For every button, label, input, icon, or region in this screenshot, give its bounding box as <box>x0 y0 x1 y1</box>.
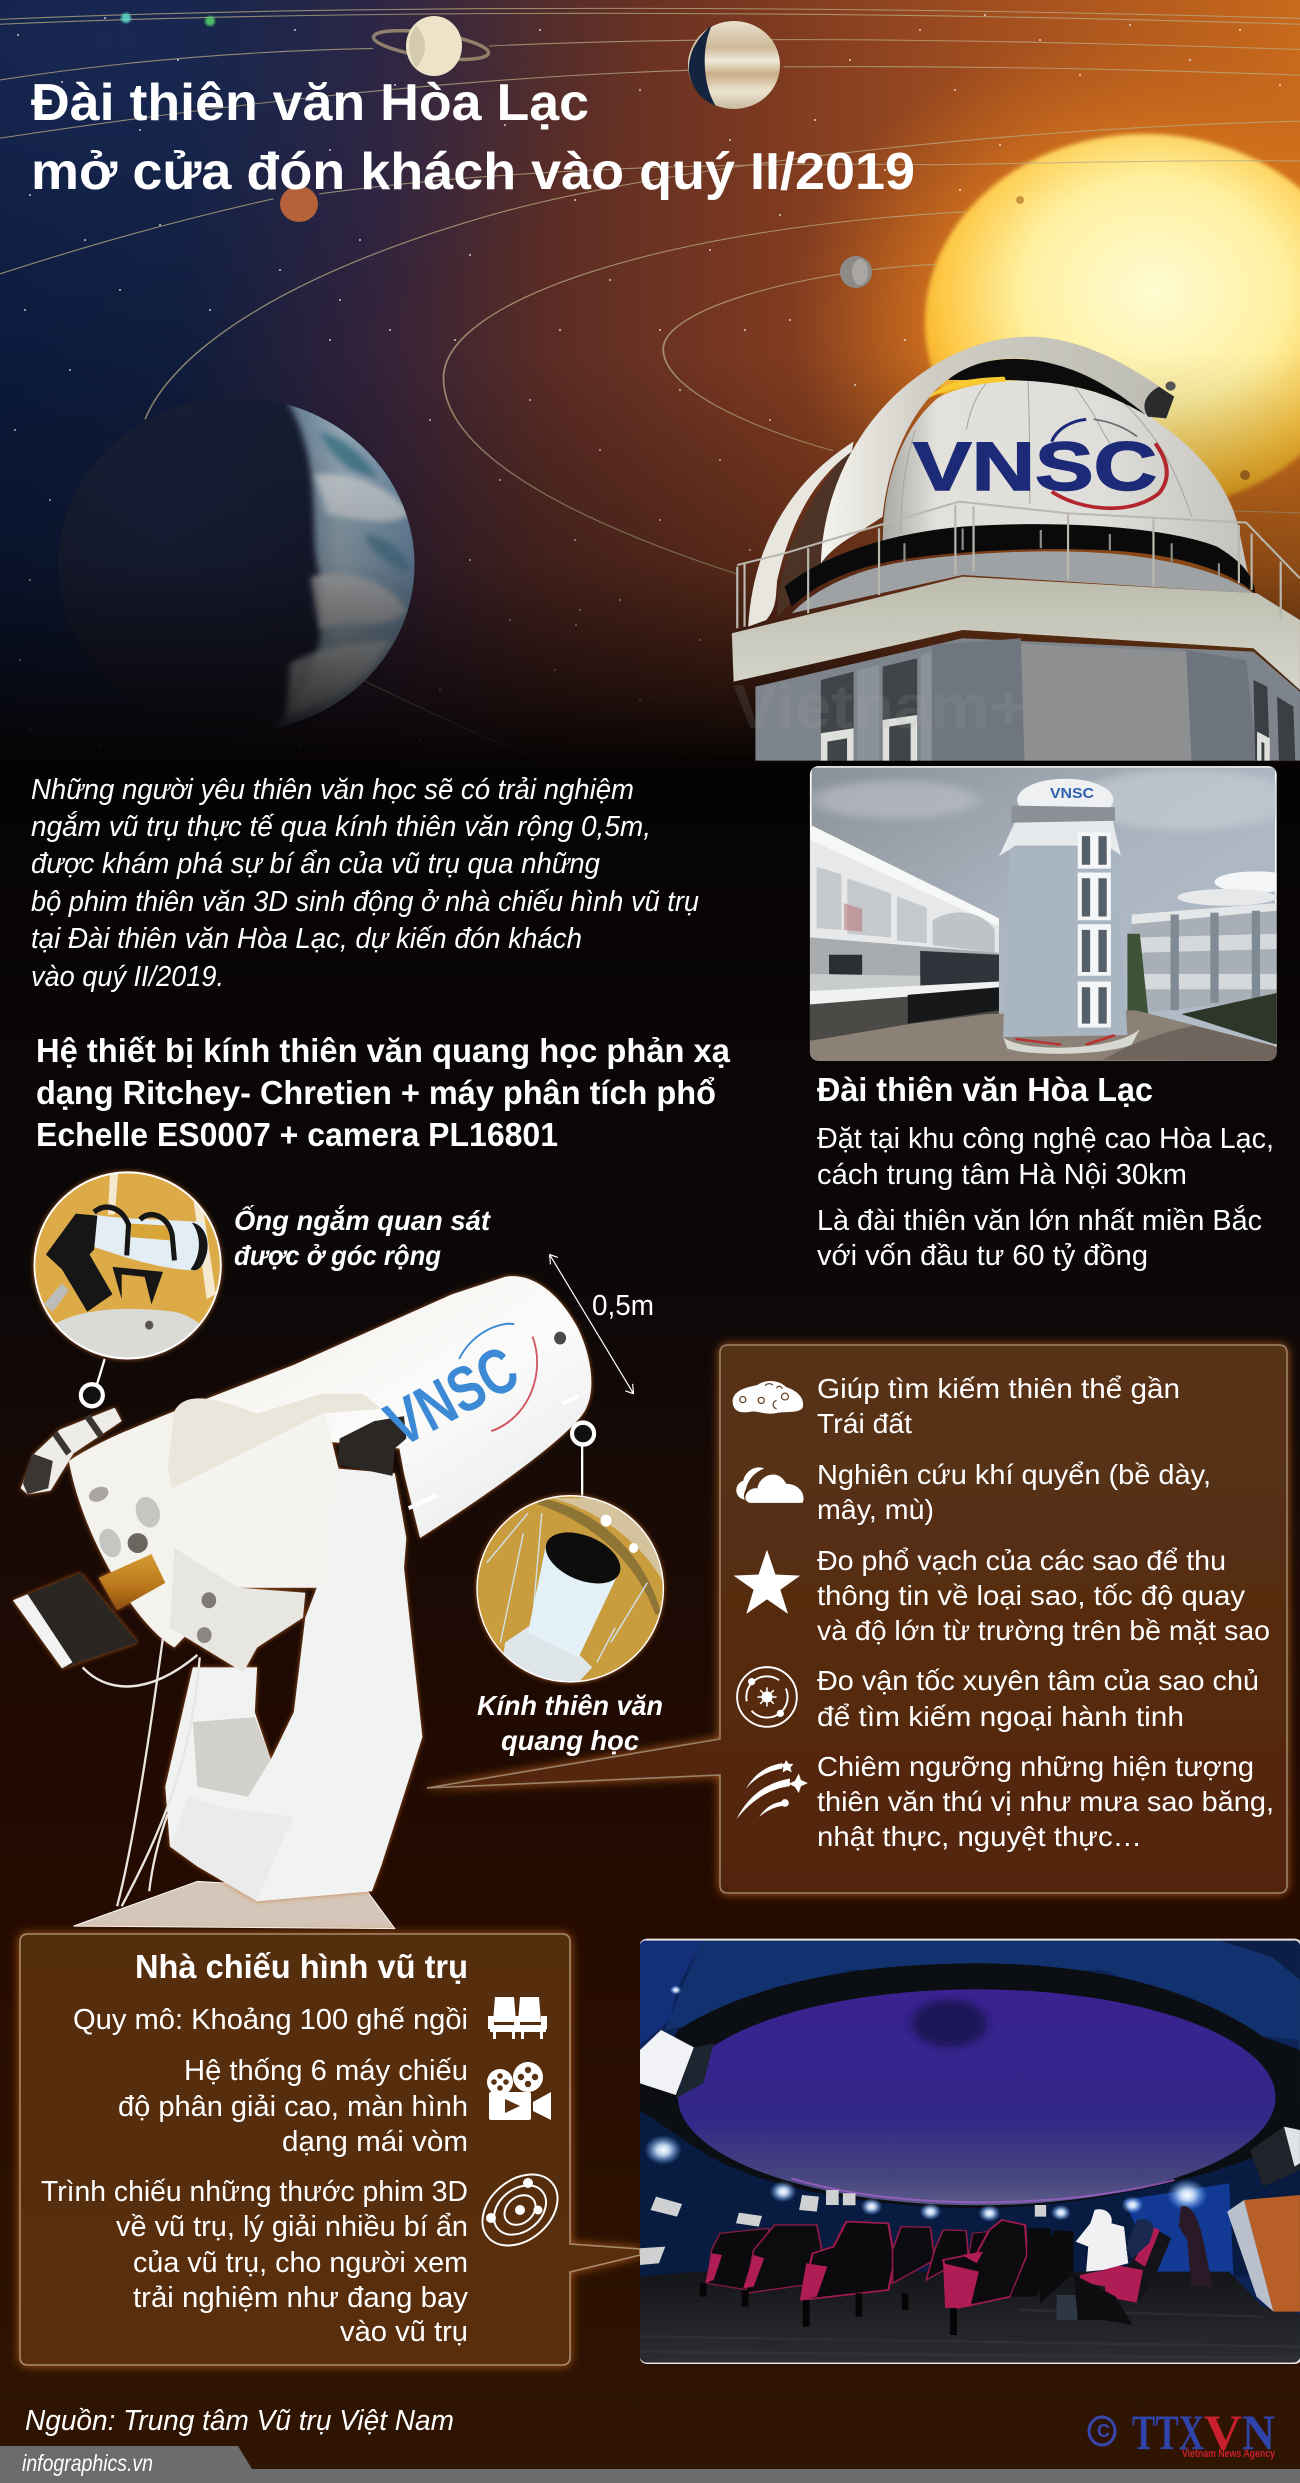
copyright mark <box>1089 2417 1115 2445</box>
tower wall <box>755 638 1300 761</box>
observatory facts <box>817 1071 1274 1272</box>
panel: telescope functions with pointer <box>427 1345 1287 1893</box>
circle photo: optical telescope <box>477 1496 675 1682</box>
pointer line to finder photo <box>94 1359 105 1394</box>
sun <box>790 32 1300 612</box>
tower <box>1003 846 1127 1037</box>
panel text: Đo vận tốc xuyên tâm của sao chủ <box>817 1665 1259 1696</box>
floor <box>640 2272 1300 2363</box>
pointer line to telescope photo <box>580 1436 585 1496</box>
planet: Earth <box>58 393 431 737</box>
camera edge <box>13 1594 73 1668</box>
fork mount <box>165 1468 422 1901</box>
intro text <box>31 774 699 993</box>
railing <box>737 502 1300 628</box>
planetarium text: Quy mô: Khoảng 100 ghế ngồi <box>73 2004 468 2036</box>
tube shading <box>168 1394 381 1488</box>
footer site name: infographics.vn <box>22 2450 153 2476</box>
facts text <box>817 1123 1274 1272</box>
intro text: tại Đài thiên văn Hòa Lạc, dự kiến đón khách <box>31 923 582 955</box>
facts text: Đặt tại khu công nghệ cao Hòa Lạc, <box>817 1123 1274 1155</box>
intro text: Những người yêu thiên văn học sẽ có trải nghiệm <box>31 774 634 806</box>
facts text: Là đài thiên văn lớn nhất miền Bắc <box>817 1204 1262 1237</box>
dome screen <box>678 1989 1276 2205</box>
panel text: mây, mù) <box>817 1494 934 1525</box>
label: optical telescope <box>477 1690 663 1756</box>
panel text: Chiêm ngưỡng những hiện tượng <box>817 1751 1254 1782</box>
planet: Jupiter <box>688 21 780 109</box>
seat cushions <box>705 2227 1160 2308</box>
footer bar <box>0 2446 1300 2483</box>
cables <box>83 1638 200 1906</box>
icon: star <box>734 1550 800 1614</box>
wall lamps <box>644 1985 1207 2222</box>
agency name: Vietnam News Agency <box>1182 2448 1276 2460</box>
telescope illustration <box>13 1170 675 1929</box>
label: finder scope: được ở góc rộng <box>234 1240 441 1271</box>
port holes <box>87 1484 164 1561</box>
balcony <box>732 577 1300 690</box>
sunlit gap <box>928 377 1006 398</box>
main arch <box>821 337 1173 563</box>
left arch of the dome <box>748 442 854 627</box>
logo: TTXVN <box>1089 2404 1276 2460</box>
gold focuser <box>99 1554 165 1610</box>
top white bar <box>640 1939 1300 1941</box>
heading: telescope equipment <box>36 1032 731 1153</box>
agency name: V <box>1204 2404 1242 2460</box>
label: optical telescope: Kính thiên văn <box>477 1690 663 1721</box>
icon: cloud <box>736 1467 804 1503</box>
planetarium text: dạng mái vòm <box>282 2126 468 2158</box>
panel text: Đo phổ vạch của các sao để thu <box>817 1545 1226 1576</box>
label: width: 0,5m <box>592 1290 654 1322</box>
dome <box>883 381 1248 573</box>
icon: shooting stars <box>736 1760 808 1819</box>
ground <box>810 1010 1277 1061</box>
planetarium heading: Nhà chiếu hình vũ trụ <box>135 1948 468 1985</box>
icon: solar system orbit <box>469 2160 571 2260</box>
right wing <box>1132 903 1277 1014</box>
icon: cinema seats <box>488 1997 547 2039</box>
title: Đài thiên văn Hòa Lạc <box>31 74 589 132</box>
panel: planetarium <box>20 1934 640 2365</box>
pointer dot: finder <box>81 1384 103 1406</box>
panel text: thiên văn thú vị như mưa sao băng, <box>817 1786 1274 1817</box>
source: Nguồn: Trung tâm Vũ trụ Việt Nam <box>25 2405 454 2437</box>
planet: small green star <box>205 16 215 26</box>
intro text: ngắm vũ trụ thực tế qua kính thiên văn rộng 0,5m, <box>31 810 651 843</box>
people <box>1057 2206 1212 2325</box>
facts text: với vốn đầu tư 60 tỷ đồng <box>817 1240 1148 1272</box>
telescope logo: VNSC <box>374 1332 529 1460</box>
agency name: TTX <box>1132 2404 1204 2460</box>
left screen <box>640 2030 694 2095</box>
planet: Mars <box>280 186 318 222</box>
title: mở cửa đón khách vào quý II/2019 <box>31 143 915 201</box>
label: finder scope <box>234 1204 492 1271</box>
circle photo: finder scope <box>28 1170 221 1364</box>
seat legs <box>703 2283 954 2335</box>
intro text: được khám phá sự bí ẩn của vũ trụ qua những <box>31 848 600 880</box>
copyright mark: C <box>1097 2421 1110 2441</box>
label: finder scope: Ống ngắm quan sát <box>234 1204 492 1236</box>
finder detail <box>23 1453 53 1494</box>
planetarium text: Trình chiếu những thước phim 3D <box>41 2176 468 2208</box>
panel text <box>817 1373 1274 1852</box>
pointer dot: telescope <box>572 1423 594 1445</box>
watermark: Vietnam+ <box>733 673 1028 742</box>
planetarium text <box>41 2004 468 2348</box>
fade of the scene into black <box>0 0 1300 782</box>
desk <box>1227 2195 1300 2312</box>
finder scope <box>21 1408 122 1494</box>
planet: small teal star <box>121 13 131 23</box>
panel text: Giúp tìm kiếm thiên thể gần <box>817 1373 1180 1404</box>
central housing <box>172 1414 337 1588</box>
dome logo: VNSC <box>913 428 1157 505</box>
title <box>31 74 915 201</box>
planetarium text: Hệ thống 6 máy chiếu <box>184 2055 468 2087</box>
panel text: Nghiên cứu khí quyển (bề dày, <box>817 1459 1211 1490</box>
panel text: và độ lớn từ trường trên bề mặt sao <box>817 1615 1270 1646</box>
label: optical telescope: quang học <box>501 1725 639 1756</box>
photo: Hoa Lac observatory building <box>810 766 1297 1061</box>
heading: telescope equipment: Hệ thiết bị kính thiên văn quang học phản xạ <box>36 1032 731 1069</box>
observatory tower with VNSC dome <box>732 337 1300 761</box>
ceiling panels <box>665 1940 1300 2040</box>
tube <box>174 1276 591 1538</box>
photo logo: VNSC <box>1050 785 1094 802</box>
black ring <box>640 1963 1300 2208</box>
dark slot band <box>785 524 1255 607</box>
planetarium text: độ phân giải cao, màn hình <box>118 2091 468 2123</box>
intro text: vào quý II/2019. <box>31 961 224 993</box>
planet: Mercury <box>840 256 872 288</box>
heading: telescope equipment: Echelle ES0007 + camera PL16801 <box>36 1116 558 1153</box>
hedge <box>1181 993 1277 1045</box>
panel text: để tìm kiếm ngoại hành tinh <box>817 1701 1184 1732</box>
camera <box>13 1573 138 1668</box>
wall posters <box>640 2190 1046 2265</box>
panel text: Trái đất <box>817 1408 912 1439</box>
planetarium text: của vũ trụ, cho người xem <box>133 2247 468 2279</box>
gear box <box>170 1548 305 1672</box>
space illustration: solar system <box>0 0 1300 782</box>
photo: planetarium interior <box>640 1939 1300 2364</box>
wall <box>640 2110 1300 2277</box>
star field <box>15 15 1285 745</box>
drive knob <box>337 1416 406 1476</box>
dome opening <box>948 359 1166 417</box>
panel text: thông tin về loại sao, tốc độ quay <box>817 1580 1245 1611</box>
planetarium text: về vũ trụ, lý giải nhiều bí ẩn <box>116 2211 468 2243</box>
telescope base plate <box>73 1881 395 1929</box>
lower drum <box>792 551 1253 613</box>
orbit lines <box>0 8 1300 760</box>
width arrow <box>550 1254 634 1394</box>
left wing <box>810 825 999 953</box>
panel text: nhật thực, nguyệt thực… <box>817 1821 1142 1852</box>
heading: telescope equipment: dạng Ritchey- Chretien + máy phân tích phổ <box>36 1074 716 1111</box>
icon: film projector <box>487 2062 551 2120</box>
seats <box>707 2220 1171 2308</box>
planetarium text: trải nghiệm như đang bay <box>133 2282 468 2314</box>
tube back end <box>69 1399 340 1648</box>
icon: asteroid <box>733 1381 803 1414</box>
facts text: cách trung tâm Hà Nội 30km <box>817 1159 1187 1191</box>
logo arcs <box>1052 419 1167 508</box>
icon: orbiting planets <box>737 1667 797 1727</box>
right projector <box>1250 2127 1300 2187</box>
planetarium text: vào vũ trụ <box>340 2316 468 2348</box>
facts heading: Đài thiên văn Hòa Lạc <box>817 1071 1153 1108</box>
planet: Saturn <box>372 16 490 76</box>
intro text: bộ phim thiên văn 3D sinh động ở nhà chiếu hình vũ trụ <box>31 886 699 918</box>
telescope logo arcs <box>459 1324 537 1431</box>
agency name: N <box>1242 2404 1275 2460</box>
